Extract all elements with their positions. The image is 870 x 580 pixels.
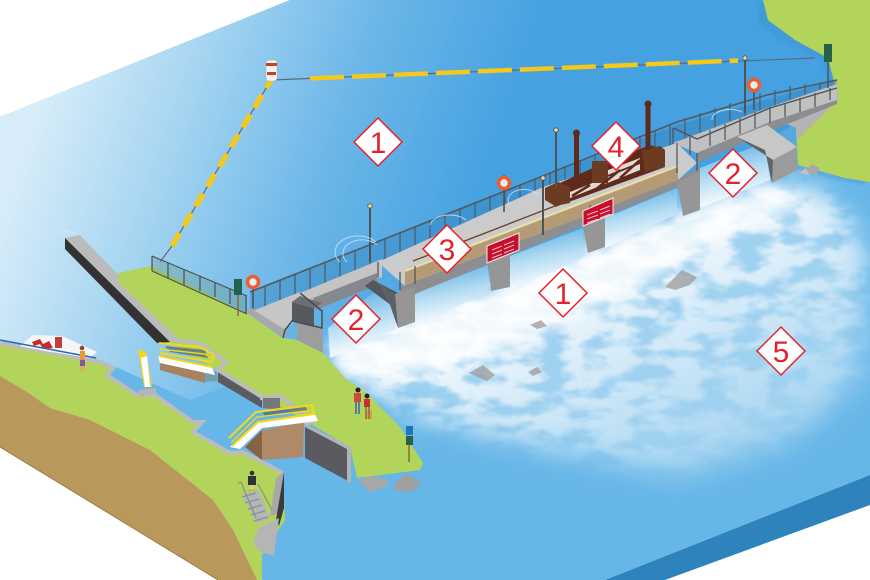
land: top right bank (758, 0, 870, 185)
land: central island (118, 266, 423, 478)
label: 5: 5 (773, 336, 789, 369)
label: 1 downstream: 1 (555, 278, 571, 311)
lock: lower gate (229, 405, 318, 460)
buoy (266, 60, 277, 81)
label: 4 (592, 122, 640, 170)
boat (0, 335, 97, 358)
water: upstream reservoir (0, 0, 870, 400)
life rings (248, 78, 760, 308)
label: 3: 3 (439, 234, 455, 267)
lamp posts (368, 56, 747, 262)
lock: long approach pier (65, 235, 180, 343)
boom: floating safety barrier (160, 58, 815, 262)
label: 1 upstream: 1 (370, 127, 386, 160)
label: 2 left (332, 295, 380, 343)
label: 2 right: 2 (725, 158, 741, 191)
lock: open yellow gate (138, 349, 152, 387)
dam: rear railing (250, 80, 837, 314)
stairs (238, 482, 272, 524)
foam: white water below dam (330, 180, 865, 475)
dam: main deck (378, 143, 700, 300)
land: left bank with soil (0, 343, 285, 580)
info signs (234, 44, 832, 462)
label: 2 right (709, 149, 757, 197)
rocks (358, 164, 820, 492)
side face of water block (605, 475, 870, 580)
lock: upper gate (158, 343, 218, 383)
label: 1 upstream (354, 118, 402, 166)
red warning signs (487, 198, 613, 263)
dam: piers (377, 172, 700, 328)
people (80, 346, 372, 494)
label: 3 (423, 225, 471, 273)
spillway falling water (328, 142, 770, 358)
left fence on island (152, 256, 247, 314)
dam: left abutment and bridge (247, 259, 400, 353)
label: 4: 4 (608, 131, 624, 164)
dam: front railing (378, 143, 697, 290)
label: 1 downstream (539, 269, 587, 317)
gate base (138, 388, 156, 397)
dam: right bridge deck (673, 84, 837, 163)
dam: right abutment (737, 125, 797, 183)
label: 2 left: 2 (348, 304, 364, 337)
ripples around structures (47, 109, 742, 262)
lock: chamber walls (0, 340, 351, 556)
hoist: brown gate lifting machinery (545, 100, 665, 207)
label: 5 (757, 327, 805, 375)
dam: timber stop logs (405, 166, 678, 285)
